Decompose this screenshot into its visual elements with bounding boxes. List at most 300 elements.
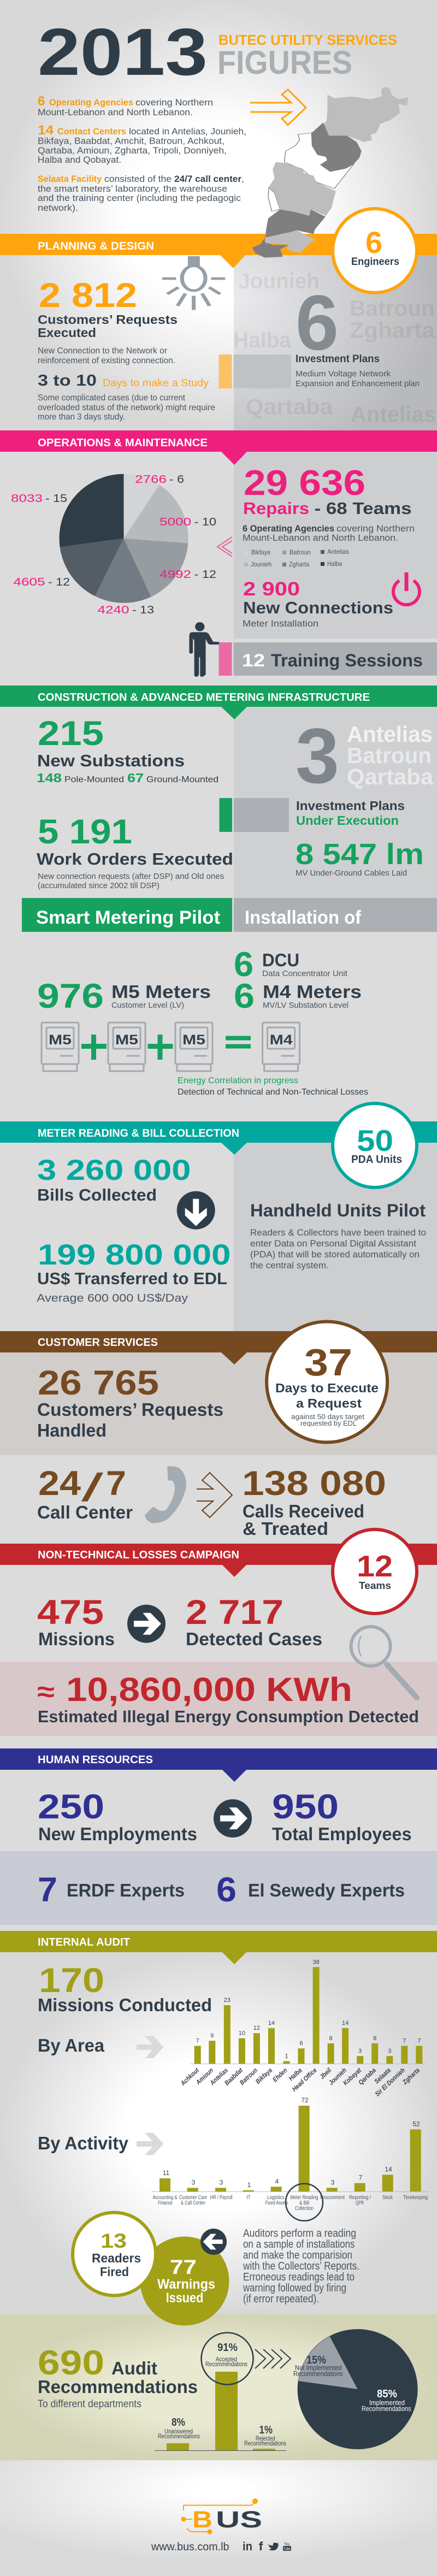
icon: meter M5 second	[108, 1023, 145, 1071]
stat: 24/7 call center: /	[81, 1466, 103, 1510]
stat: 2 900 new connections: 2 900	[243, 578, 300, 600]
stat: 6 investment plans	[218, 280, 420, 388]
icon: map of north Lebanon	[252, 86, 408, 258]
bar chart: missions by activity: 14	[385, 2165, 392, 2173]
stat: 976 M5 meters	[37, 977, 211, 1015]
intro text block: Selaata Facility	[38, 174, 102, 184]
intro text block: ,	[241, 174, 244, 184]
icon: magnifying glass	[351, 1627, 417, 1698]
legend: agencies	[244, 548, 349, 568]
stat: 6 investment plans: Medium Voltage Network	[296, 369, 391, 379]
stat: 950 total employees: 950	[272, 1788, 339, 1826]
stat: US$ transferred to EDL	[37, 1239, 231, 1304]
bar chart: missions by activity	[151, 2096, 429, 2221]
panel: experts band	[0, 1851, 437, 1925]
stat: 8 547 lm cables: 8 547 lm	[296, 838, 424, 871]
intro text block: 14	[38, 123, 54, 138]
bar chart: recommendation status: Rejected	[256, 2435, 275, 2442]
bar chart: missions by area: Head Office	[291, 2067, 318, 2093]
intro text block: network).	[38, 203, 78, 213]
bar chart: missions by area: Kobayat	[342, 2066, 363, 2087]
icon: plus	[81, 1035, 107, 1060]
stat: 3 to 10 days: more than 3 days study.	[38, 412, 125, 422]
band: operations and maintenance: OPERATIONS & MAINTENANCE	[38, 437, 208, 449]
stat: illegal energy consumption: Estimated Illegal Energy Consumption Detected	[38, 1707, 419, 1726]
text: auditors explanation: Erroneous readings lead to	[243, 2271, 355, 2283]
panel: planning right side	[234, 255, 437, 430]
band: construction and metering	[0, 686, 437, 719]
bar chart: recommendation status: Unanswered	[164, 2427, 193, 2435]
stat: 250 new employments: New Employments	[38, 1824, 197, 1844]
panel: audit recommendations band	[0, 2314, 437, 2460]
stat: US$ transferred to EDL: Average 600 000 US$/Day	[37, 1292, 188, 1304]
stat: 5 191 work orders: 5 191	[38, 813, 132, 851]
icon: meter M4	[263, 1023, 300, 1071]
bar chart: missions by area: Baabdat	[223, 2066, 245, 2087]
stat: 29 636 repairs: covering Northern	[336, 523, 415, 534]
pie chart: repairs per agency: - 15	[45, 493, 67, 505]
stat: 6 M4 meters: 6	[234, 977, 255, 1015]
panel: illegal consumption band	[0, 1662, 437, 1736]
watermark: area names: Zgharta	[350, 318, 435, 342]
bar chart: recommendation status: Recommendations	[244, 2439, 286, 2447]
callout: 37 days: requested by EDL	[300, 1419, 357, 1427]
stat: 170 missions conducted: 170	[39, 1961, 104, 2000]
stat: 475 missions: Missions	[38, 1629, 115, 1649]
stat: 976 M5 meters: Customer Level (LV)	[111, 1001, 184, 1010]
stat: 6 investment plans: Investment Plans	[296, 353, 380, 365]
bar chart: missions by activity: 52	[412, 2120, 420, 2128]
pie chart: implementation rate: Implemented	[369, 2398, 405, 2407]
panel: meter reading right side	[234, 1143, 437, 1331]
bar chart: missions by activity: Fixed Assets	[265, 2200, 288, 2206]
stat: 2812 customers' requests: 2 812	[39, 276, 137, 315]
panel: internal audit background	[0, 1952, 437, 2314]
stat: 138 080 calls: Calls Received	[243, 1501, 364, 1521]
stat: bills collected: 3 260 000	[37, 1154, 191, 1186]
footer: website and social links: www.bus.com.lb	[151, 2541, 229, 2553]
band: planning and design	[0, 234, 437, 268]
stat: experts	[38, 1871, 405, 1909]
text: energy correlation: Detection of Technical and Non-Technical Losses	[178, 1088, 368, 1097]
callout: 37 days	[267, 1322, 387, 1442]
intro text block: Contact Centers	[57, 126, 126, 137]
stat: 2812 customers' requests	[38, 276, 178, 365]
bar chart: missions by area: 6	[299, 2040, 303, 2047]
callout: 77 warnings issued	[140, 2236, 229, 2326]
stat: 2812 customers' requests: reinforcement of existing connection.	[38, 356, 175, 365]
stat: customers' requests handled	[37, 1364, 223, 1440]
stat: 3 investment plans under execution	[220, 713, 434, 832]
bar chart: missions by area: 14	[342, 2020, 349, 2026]
stat: 690 audit recommendations	[38, 2344, 198, 2410]
band: meter reading and bill collection	[0, 1121, 437, 1155]
stat: 3 to 10 days: Some complicated cases (due to current	[38, 393, 186, 403]
bar chart: missions by activity: Collection	[295, 2206, 314, 2212]
stat: 215 new substations: 148	[37, 771, 62, 785]
pie chart: repairs per agency: - 6	[169, 474, 184, 486]
footer: website and social links: f	[259, 2539, 263, 2553]
bar chart: missions by activity: Reporting /	[349, 2195, 371, 2201]
icon: plus second	[147, 1035, 173, 1060]
intro text block: located in Antelias, Jounieh,	[129, 126, 246, 137]
stat: 215 new substations: Pole-Mounted	[64, 775, 124, 784]
arrow: by area	[137, 2036, 164, 2058]
stat: 5 191 work orders: Work Orders Executed	[37, 849, 233, 868]
stat: 2 900 new connections: New Connections	[243, 598, 393, 617]
text: handheld units pilot: Readers & Collectors have been trained to	[250, 1227, 426, 1238]
bar chart: missions by activity: Stock	[382, 2195, 393, 2201]
bar chart: missions by area: 38	[312, 1959, 320, 1965]
bar chart: recommendation status: Recommendations	[205, 2360, 247, 2368]
text: handheld units pilot: Handheld Units Pilot	[250, 1201, 426, 1220]
stat: 3 to 10 days: overloaded status of the network) might require	[38, 403, 215, 412]
stat: 6 DCU: 6	[234, 946, 253, 984]
bar chart: missions by area: Qartaba	[357, 2067, 377, 2087]
text: auditors explanation: on a sample of installations	[243, 2238, 355, 2250]
band: human resources	[0, 1748, 437, 1782]
callout: 13 readers fired: Readers	[92, 2251, 141, 2265]
bar chart: missions by area: Amioun	[194, 2067, 215, 2087]
bar chart: missions by activity: 7	[359, 2174, 363, 2182]
icon: meter M5	[42, 1023, 79, 1071]
icon: chevrons	[255, 2349, 291, 2368]
callout: 6 engineers: Engineers	[351, 256, 399, 268]
stat: 5 191 work orders: New connection requests (after DSP) and Old ones	[38, 872, 224, 881]
stat: 690 audit recommendations: 690	[38, 2344, 104, 2382]
intro text block: Operating Agencies	[49, 97, 133, 108]
bar chart: missions by activity: QPR	[356, 2200, 364, 2206]
bar chart: missions by area: 23	[224, 1997, 231, 2004]
logo: BUS: B	[192, 2507, 212, 2533]
stat: 6 DCU	[234, 946, 348, 984]
banner: smart metering pilot: Smart Metering Pilot	[36, 907, 220, 928]
stat: 29 636 repairs	[243, 463, 415, 543]
callout: 37 days: against 50 days target	[291, 1413, 364, 1421]
text: handheld units pilot	[250, 1201, 426, 1271]
stat: customers' requests handled: 26 765	[38, 1364, 159, 1402]
stat: 250 new employments	[38, 1788, 197, 1844]
stat: 138 080 calls	[242, 1464, 386, 1539]
title: BUTEC UTILITY SERVICES	[218, 32, 397, 48]
watermark: area names: Batroun	[350, 297, 435, 321]
callout: 6 engineers: 6	[365, 225, 382, 259]
callout: 37 days: Days to Execute	[275, 1381, 379, 1395]
stat: 3 investment plans under execution: Antelias	[347, 722, 433, 747]
icon: phone handset	[145, 1466, 186, 1523]
footer: website and social links: in	[243, 2539, 252, 2553]
pie chart: repairs per agency: - 13	[132, 604, 154, 616]
stat: 24/7 call center: Call Center	[37, 1502, 133, 1522]
band: human resources: HUMAN RESOURCES	[38, 1754, 153, 1766]
stat: illegal energy consumption: ≈	[37, 1676, 55, 1707]
pie chart: implementation rate: Recommendations	[362, 2404, 411, 2413]
pie chart: implementation rate	[293, 2329, 418, 2449]
bar chart: missions by area: Batroun	[239, 2067, 259, 2087]
text: energy correlation	[178, 1076, 368, 1097]
stat: 170 missions conducted: Missions Conducted	[38, 1995, 212, 2015]
band: planning and design: PLANNING & DESIGN	[38, 240, 154, 252]
callout: 12 teams	[333, 1529, 417, 1614]
stat: 6 M4 meters: MV/LV Substation Level	[263, 1001, 349, 1010]
pie chart: implementation rate: 85%	[377, 2388, 397, 2400]
text: handheld units pilot: the central system.	[250, 1260, 329, 1271]
intro text block: Halba and Qobayat.	[38, 155, 121, 165]
icon: light bulb	[162, 258, 225, 310]
icon: power button	[393, 572, 420, 605]
stat: 215 new substations	[37, 714, 218, 785]
stat: 6 investment plans: 6	[296, 280, 339, 367]
stat: 215 new substations: New Substations	[37, 751, 185, 770]
watermark: area names	[233, 269, 436, 427]
stat: 690 audit recommendations: Audit	[111, 2358, 157, 2378]
stat: 24/7 call center: 7	[106, 1464, 126, 1503]
callout: 50 PDA units: 50	[357, 1124, 393, 1157]
text: handheld units pilot: (PDA) that will be stored automatically on	[250, 1249, 420, 1260]
stat: experts: 7	[38, 1871, 57, 1909]
bar chart: recommendation status: 1%	[259, 2424, 273, 2436]
bar chart: missions by area: 9	[210, 2033, 214, 2039]
callout: 50 PDA units	[333, 1103, 417, 1187]
stat: 2 900 new connections	[243, 578, 393, 629]
intro text block: 6	[38, 94, 45, 109]
bar chart: missions by area: Jbeil	[318, 2066, 333, 2081]
stat: 24/7 call center: 24	[38, 1464, 81, 1503]
bar chart: missions by activity: 3	[220, 2178, 223, 2186]
bar chart: missions by area: Bikfaya	[255, 2067, 274, 2085]
icon: meter M5 third	[175, 1023, 212, 1071]
title: FIGURES	[217, 44, 352, 81]
intro text block: the smart meters’ laboratory, the warehouse	[38, 184, 227, 194]
band: non-technical losses	[0, 1544, 437, 1577]
stat: 29 636 repairs: 29 636	[244, 463, 365, 503]
icon: double chevron	[217, 537, 232, 557]
stat: illegal energy consumption: 10,860,000 KWh	[66, 1671, 352, 1708]
bar chart: missions by area: Ehden	[271, 2067, 289, 2084]
stat: experts: 6	[216, 1871, 237, 1909]
bar chart: recommendation status: 8%	[172, 2417, 185, 2429]
bar chart: missions by area: 7	[196, 2037, 199, 2044]
watermark: area names: Antelias	[351, 403, 436, 427]
stat: 2 717 detected cases	[186, 1593, 322, 1649]
icon: person	[189, 622, 221, 677]
stat: 976 M5 meters: M5 Meters	[111, 982, 211, 1002]
callout: training sessions: 12	[242, 651, 265, 670]
stat: 215 new substations: Ground-Mounted	[146, 775, 218, 784]
icon: right arrow HR	[214, 1799, 252, 1838]
bar chart: missions by area: 10	[239, 2030, 245, 2036]
intro text block: Mount-Lebanon and North Lebanon.	[38, 107, 193, 117]
icon: arrow to calls	[197, 1473, 232, 1517]
bar chart: missions by activity: Procurement	[320, 2195, 345, 2201]
stat: illegal energy consumption	[37, 1671, 419, 1726]
callout: training sessions	[218, 642, 437, 676]
icon: equals	[226, 1038, 251, 1047]
heading: by activity: By Activity	[38, 2133, 129, 2153]
band: operations and maintenance	[0, 430, 437, 465]
pie chart: repairs per agency: 4240	[97, 604, 129, 616]
callout: training sessions: Training Sessions	[271, 651, 423, 670]
stat: experts: ERDF Experts	[67, 1880, 185, 1900]
bar chart: missions by area: 7	[417, 2037, 421, 2044]
pie chart: implementation rate: Not Implemented	[295, 2364, 342, 2372]
panel: operations right side	[234, 452, 437, 639]
stat: 2812 customers' requests: Customers’ Requests	[38, 312, 178, 327]
bar chart: missions by activity: & Call Center	[181, 2200, 206, 2206]
intro text block: Qartaba, Amioun, Zgharta, Tripoli, Donniyeh,	[38, 145, 227, 156]
band: non-technical losses: NON-TECHNICAL LOSSES CAMPAIGN	[38, 1549, 239, 1561]
legend: agencies: Bikfaya	[251, 548, 270, 556]
band: construction and metering: CONSTRUCTION & ADVANCED METERING INFRASTRUCTURE	[38, 692, 370, 704]
heading: by area: By Area	[38, 2035, 105, 2055]
callout: 37 days: a Request	[296, 1396, 362, 1410]
title: 2013	[38, 15, 208, 89]
bar chart: missions by activity: Finance	[158, 2200, 173, 2206]
text: auditors explanation: and make the comparision	[243, 2249, 352, 2261]
pie chart: repairs per agency: 2766	[135, 474, 167, 486]
callout: 77 warnings issued: 77	[170, 2256, 197, 2278]
stat: 29 636 repairs: Repairs	[243, 499, 309, 518]
bar chart: missions by activity: 72	[301, 2096, 309, 2104]
pie chart: repairs per agency: 5000	[160, 516, 191, 528]
logo: BUS: US	[216, 2507, 262, 2533]
icon: twitter bird	[268, 2543, 279, 2550]
stat: 3 investment plans under execution: Batroun	[347, 743, 432, 768]
stat: 2812 customers' requests: New Connection to the Network or	[38, 346, 168, 356]
stat: 170 missions conducted	[38, 1961, 212, 2015]
stat: US$ transferred to EDL: 199 800 000	[38, 1239, 231, 1271]
intro text block: and the training center (including the pedagogic	[38, 193, 241, 203]
pie chart: repairs per agency: 4605	[13, 576, 45, 588]
stat: customers' requests handled: Handled	[37, 1420, 107, 1440]
banner: smart metering pilot: Installation of	[245, 907, 362, 928]
legend: agencies: Halba	[327, 560, 342, 568]
stat: 2 717 detected cases: 2 717	[186, 1593, 284, 1632]
legend: agencies: Jounieh	[251, 560, 271, 568]
bar chart: missions by area: 12	[253, 2025, 260, 2031]
stat: bills collected: Bills Collected	[37, 1185, 157, 1204]
icon: down arrow	[177, 1191, 215, 1230]
stat: customers' requests handled: Customers’ Requests	[37, 1399, 223, 1420]
pie chart: implementation rate: 15%	[306, 2354, 326, 2366]
intro text block: 24/7 call center	[174, 174, 241, 184]
panel: footer background	[0, 2460, 437, 2576]
callout: 50 PDA units: PDA Units	[351, 1154, 402, 1166]
legend: agencies: Batroun	[290, 548, 311, 556]
callout: 77 warnings issued: Warnings	[157, 2277, 215, 2292]
stat: 3 to 10 days: Days to make a Study	[103, 377, 209, 388]
stat: 6 DCU: Data Concentrator Unit	[262, 969, 348, 978]
stat: 2 900 new connections: Meter Installation	[243, 618, 318, 629]
diagram: meter equation	[42, 1023, 300, 1071]
bar chart: missions by activity: Logistics /	[267, 2195, 287, 2201]
band: meter reading and bill collection: METER READING & BILL COLLECTION	[38, 1127, 239, 1139]
stat: 250 new employments: 250	[38, 1788, 104, 1826]
banner: smart metering pilot	[22, 898, 437, 932]
arrow: by activity	[137, 2133, 164, 2155]
stat: 976 M5 meters: 976	[37, 977, 104, 1015]
bar chart: missions by activity: 3	[192, 2178, 196, 2186]
title	[38, 15, 397, 89]
bar chart: missions by activity: HR / Payroll	[210, 2195, 233, 2201]
stat: experts: El Sewedy Experts	[248, 1880, 405, 1900]
watermark: area names: Halba	[233, 328, 292, 352]
stat: 3 investment plans under execution: 3	[296, 713, 339, 800]
text: auditors explanation	[243, 2228, 359, 2305]
intro background	[0, 0, 437, 430]
logo: BUS	[181, 2498, 262, 2534]
bar chart: missions by area: Selaata	[373, 2067, 392, 2085]
stat: 690 audit recommendations: Recommendations	[38, 2377, 198, 2397]
intro text block: covering Northern	[135, 97, 213, 108]
footer: website and social links	[151, 2539, 291, 2553]
callout: 12 teams: Teams	[359, 1580, 391, 1591]
intro text block: Bikfaya, Baabdat, Amchit, Batroun, Achkout,	[38, 135, 225, 146]
footer: website and social links: Tube	[284, 2547, 291, 2551]
stat: 6 M4 meters: M4 Meters	[263, 982, 362, 1002]
bar chart: missions by area: Zgharta	[401, 2067, 421, 2086]
stat: 5 191 work orders: (accumulated since 2002 till DSP)	[38, 881, 160, 890]
stat: 690 audit recommendations: To different departments	[38, 2398, 141, 2410]
band: customer services	[0, 1331, 437, 1364]
icon: meter M5: M5	[49, 1032, 72, 1048]
icon: left arrow	[200, 2229, 227, 2255]
bar chart: missions by activity: 1	[247, 2181, 251, 2189]
text: auditors explanation: (if error repeated).	[243, 2293, 319, 2305]
watermark: area names: Jounieh	[238, 269, 320, 293]
band: internal audit	[0, 1931, 437, 1964]
stat: 29 636 repairs: - 68 Teams	[315, 499, 412, 518]
stat: 475 missions	[37, 1593, 115, 1649]
stat: 215 new substations: 215	[38, 714, 104, 753]
bar chart: missions by area: 14	[268, 2020, 275, 2026]
callout: 13 readers fired	[73, 2212, 156, 2295]
bar chart: missions by area: 1	[285, 2053, 288, 2059]
stat: bills collected	[37, 1154, 191, 1204]
pie chart: repairs per agency: 8033	[11, 493, 43, 505]
icon: meter M5 third: M5	[182, 1032, 205, 1048]
bar chart: missions by area	[179, 1959, 427, 2098]
callout: 12 teams: 12	[357, 1549, 393, 1583]
bar chart: missions by area: Sir El Donnieh	[374, 2067, 406, 2098]
bar chart: missions by activity: 4	[275, 2177, 279, 2185]
intro text block: consisted of the	[104, 174, 172, 184]
stat: 3 investment plans under execution: Qartaba	[347, 764, 434, 789]
intro text block	[38, 94, 246, 213]
stat: 138 080 calls: & Treated	[243, 1519, 328, 1539]
band: customer services: CUSTOMER SERVICES	[38, 1337, 158, 1349]
pie chart: repairs per agency: - 12	[194, 569, 216, 581]
watermark: area names: Qartaba	[246, 395, 333, 419]
stat: 3 to 10 days: 3 to 10	[38, 372, 97, 389]
bar chart: missions by activity: 3	[331, 2178, 335, 2186]
stat: 2 717 detected cases: Detected Cases	[186, 1629, 322, 1649]
stat: 29 636 repairs: 6 Operating Agencies	[243, 523, 334, 534]
bar chart: missions by activity: Customer Care	[179, 2195, 207, 2201]
text: handheld units pilot: enter Data on Personal Digital Assistant	[250, 1238, 416, 1249]
stat: 8 547 lm cables: MV Under-Ground Cables Laid	[296, 868, 407, 878]
stat: 2812 customers' requests: Executed	[38, 326, 96, 340]
stat: 3 investment plans under execution: Investment Plans	[296, 799, 405, 813]
bar chart: missions by area: 3	[388, 2048, 391, 2054]
bar chart: recommendation status: 91%	[217, 2342, 238, 2354]
callout: 13 readers fired: 13	[101, 2230, 127, 2252]
panel: construction right side	[234, 707, 437, 898]
callout: 37 days: 37	[304, 1341, 352, 1384]
bar chart: missions by area: 8	[329, 2035, 333, 2042]
panel: customer services tinted band	[0, 1352, 437, 1455]
pie chart: repairs per agency	[11, 474, 216, 616]
